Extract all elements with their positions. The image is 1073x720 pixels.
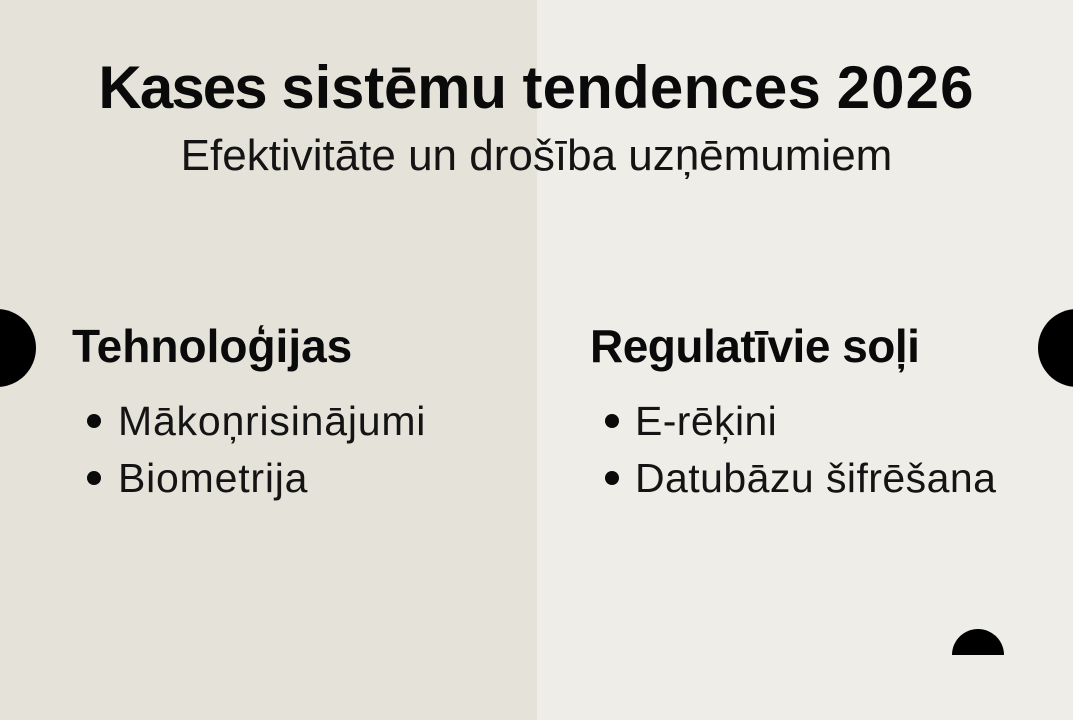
panel: regulatory steps	[590, 320, 996, 501]
icon: right half circle	[1038, 309, 1073, 387]
heading: regulatory steps: Regulatīvie soļi	[590, 320, 919, 372]
list item: e-invoices: E-rēķini	[635, 398, 777, 444]
list item: database encryption: Datubāzu šifrēšana	[635, 455, 996, 501]
title: Kases sistēmu tendences 2026	[98, 54, 975, 121]
subtitle: Efektivitāte un drošība uzņēmumiem	[181, 131, 892, 180]
panel: left background	[0, 0, 537, 720]
icon: left half circle	[0, 309, 36, 387]
list item: biometrics: Biometrija	[118, 455, 308, 501]
heading: technologies: Tehnoloģijas	[72, 320, 352, 372]
icon: bottom half circle	[952, 629, 1004, 655]
panel: technologies	[72, 320, 426, 501]
list item: cloud solutions: Mākoņrisinājumi	[118, 398, 426, 444]
panel: right background	[537, 0, 1073, 720]
